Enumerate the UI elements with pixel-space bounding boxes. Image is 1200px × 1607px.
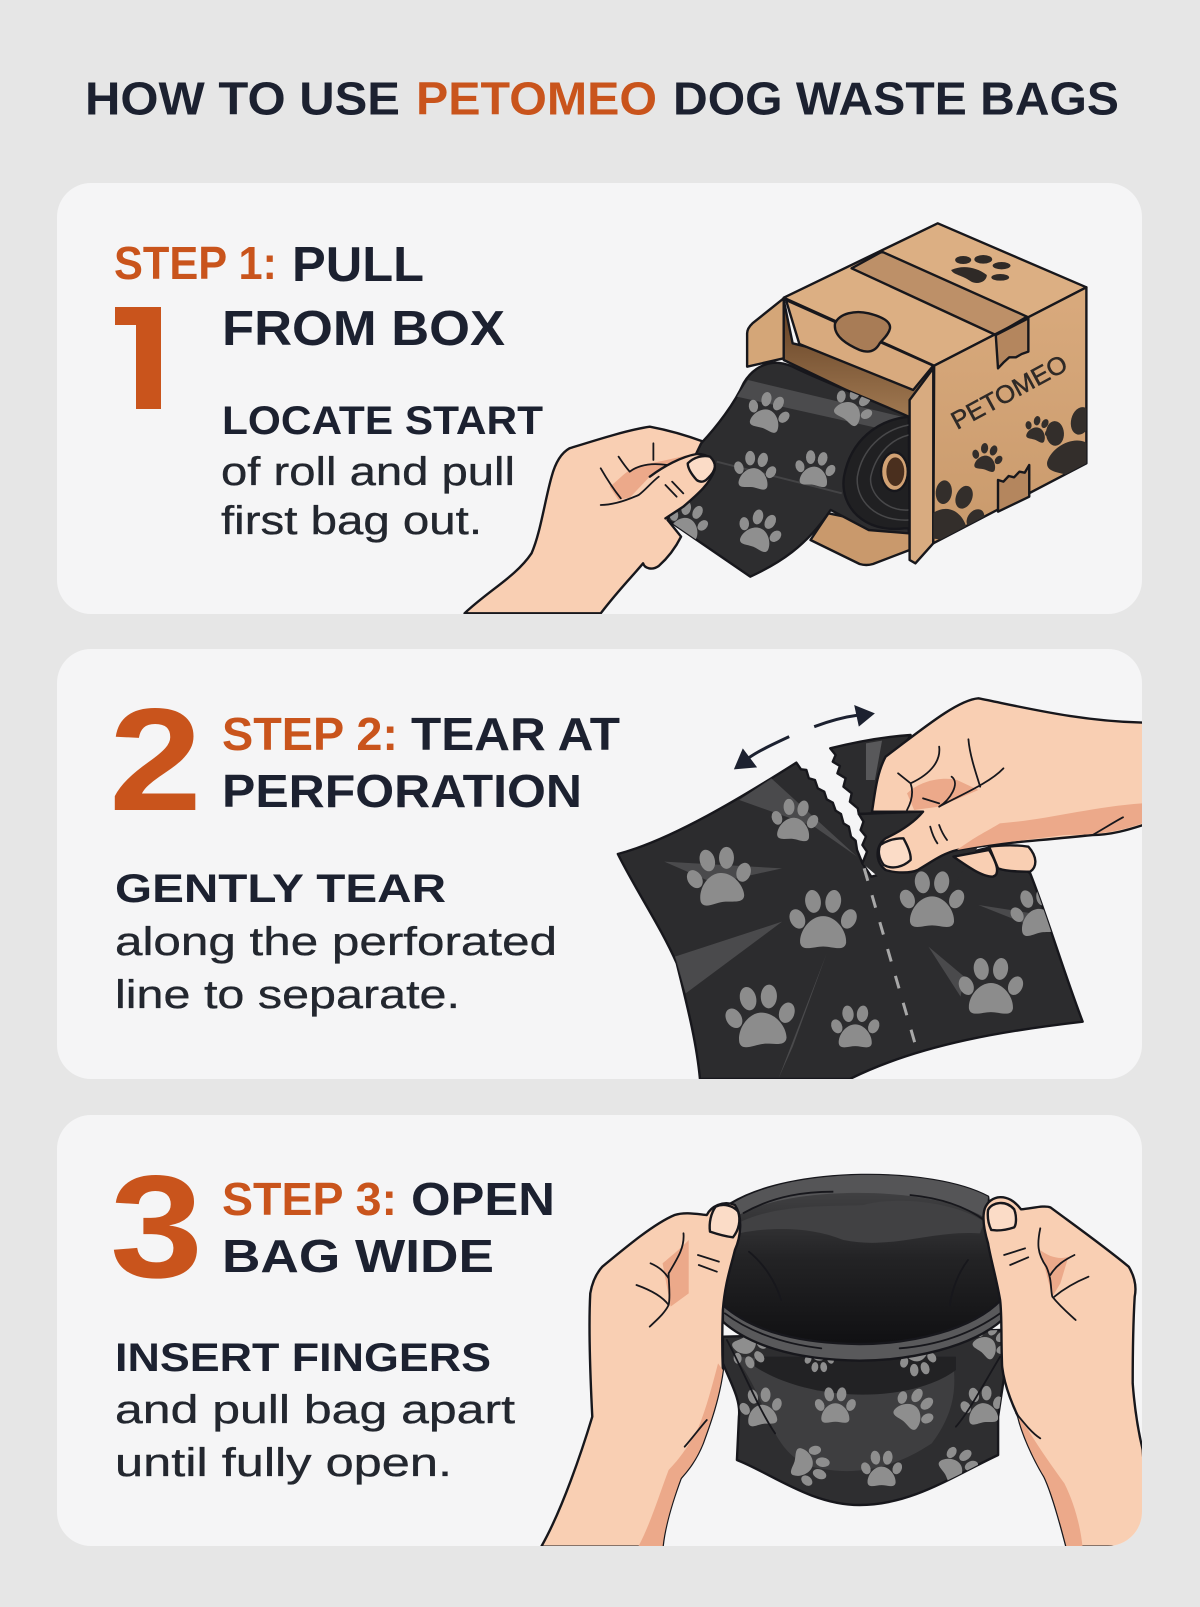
hand shading <box>907 779 978 810</box>
step 1 heading: FROM BOX <box>222 302 505 356</box>
right hand <box>984 1197 1149 1547</box>
bag top rim <box>733 1175 988 1218</box>
box back flap <box>747 298 784 367</box>
box lower tape <box>998 465 1029 512</box>
step 2 description: GENTLY TEAR <box>115 867 446 911</box>
box interior <box>784 300 927 420</box>
card background <box>57 649 1142 1079</box>
box side flap <box>910 368 933 563</box>
box side paws <box>934 356 1086 540</box>
step 3 heading: OPEN <box>411 1173 555 1225</box>
inner wave highlight <box>739 1201 984 1243</box>
illustration: hand tearing bag <box>618 698 1146 1079</box>
step number 2: 2 <box>109 678 202 841</box>
step number 1 <box>115 307 161 409</box>
step 2 description <box>115 867 557 1017</box>
step 3 description: until fully open. <box>115 1441 452 1485</box>
bag wrinkle lines <box>749 1252 968 1305</box>
hand creases <box>601 443 683 505</box>
roll end <box>843 417 910 529</box>
hand base <box>465 427 708 613</box>
title: DOG WASTE BAGS <box>673 72 1119 124</box>
thumbnail <box>688 456 715 482</box>
bag sheet <box>618 763 1083 1079</box>
box floor <box>811 513 910 565</box>
box brand text: PETOMEO <box>947 350 1072 435</box>
step 2 heading: TEAR AT <box>411 708 620 760</box>
panel: step 2 <box>57 649 1146 1079</box>
direction arrows <box>734 705 875 769</box>
step number 3: 3 <box>110 1145 203 1308</box>
thumb <box>630 455 709 516</box>
bag sheen and paws <box>664 778 1069 1078</box>
step 3 description: INSERT FINGERS <box>115 1336 491 1380</box>
step number 1: 1 <box>112 281 178 440</box>
step 3 heading: STEP 3: <box>222 1173 397 1225</box>
step 1 description: first bag out. <box>221 499 482 543</box>
step 1 heading: STEP 1: <box>114 237 277 289</box>
lower fingers <box>953 850 997 877</box>
step 2 description: along the perforated <box>115 920 557 964</box>
flap handle hole <box>835 312 890 352</box>
left hand creases <box>636 1233 719 1447</box>
tape on top <box>852 252 1027 335</box>
left hand <box>541 1203 740 1547</box>
bag corner held under the thumb <box>860 813 978 876</box>
thumbnail <box>879 838 911 867</box>
paw on box top <box>951 255 1010 283</box>
palm shading <box>610 453 694 500</box>
box top <box>784 223 1086 366</box>
step 2 heading: STEP 2: <box>222 708 398 760</box>
step 3 heading <box>222 1173 555 1282</box>
hand <box>872 698 1146 872</box>
step 1 description <box>221 399 543 543</box>
panel: step 1 <box>57 183 1142 614</box>
step 1 heading: PULL <box>292 238 424 292</box>
step 3 heading: BAG WIDE <box>222 1230 494 1282</box>
card background <box>57 1115 1142 1546</box>
illustration: hand pulling bag from box <box>465 223 1139 613</box>
title: PETOMEO <box>416 72 657 124</box>
bag lower body <box>723 1330 1004 1505</box>
panel: step 3 <box>57 1115 1149 1547</box>
bag paws <box>662 378 909 557</box>
box front flap <box>786 300 933 390</box>
step 3 description: and pull bag apart <box>115 1388 515 1432</box>
step 2 description: line to separate. <box>115 973 460 1017</box>
torn upper bag piece <box>830 735 911 814</box>
box side tape <box>996 318 1028 368</box>
illustration: hands opening bag <box>541 1175 1149 1547</box>
title <box>85 72 1119 124</box>
front rim band <box>723 1300 1002 1361</box>
hand creases <box>898 739 1123 843</box>
right thumbnail <box>988 1203 1016 1230</box>
box right face <box>933 287 1086 543</box>
step 2 heading: PERFORATION <box>222 765 582 817</box>
right hand shading <box>1018 1417 1082 1546</box>
title: HOW TO USE <box>85 72 400 124</box>
card background <box>57 183 1142 614</box>
bag opening <box>723 1175 1003 1360</box>
left hand shading <box>638 1363 723 1546</box>
left thumbnail <box>710 1205 739 1237</box>
step 3 description <box>115 1336 515 1485</box>
step 1 description: LOCATE START <box>222 399 543 443</box>
bag ribbon <box>668 363 909 577</box>
perforation line <box>864 868 916 1047</box>
right hand creases <box>1004 1228 1089 1438</box>
bag see-through area and paws <box>724 1315 1017 1494</box>
step 1 heading <box>114 237 505 356</box>
step 2 heading <box>222 708 620 817</box>
step 1 description: of roll and pull <box>221 450 515 494</box>
